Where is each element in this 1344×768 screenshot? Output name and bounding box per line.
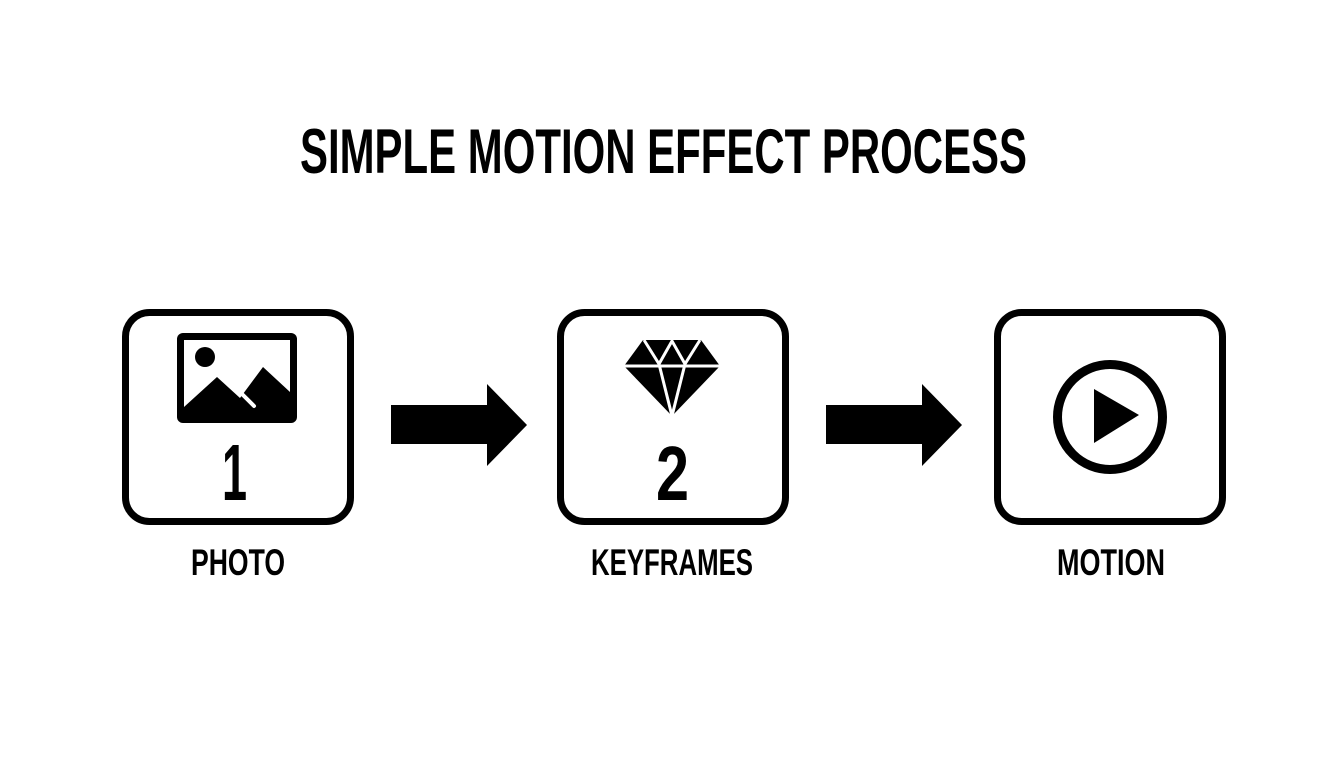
icon: diamond [624,340,720,416]
box 1 [126,312,350,522]
label: motion: MOTION [1057,542,1165,583]
box 2 [560,312,786,522]
label: keyframes: KEYFRAMES [591,542,753,583]
step 1: photo [126,312,350,583]
number 2: 2 [656,431,689,517]
number 1: 1 [222,428,247,517]
icon: photo [177,333,297,423]
step 3: motion [998,312,1222,583]
box 3 [998,312,1222,522]
step 2: keyframes [560,312,786,583]
label: photo: PHOTO [191,542,285,583]
arrow 2 [826,384,962,466]
arrow 1 [391,384,527,466]
icon: play [1058,364,1162,470]
